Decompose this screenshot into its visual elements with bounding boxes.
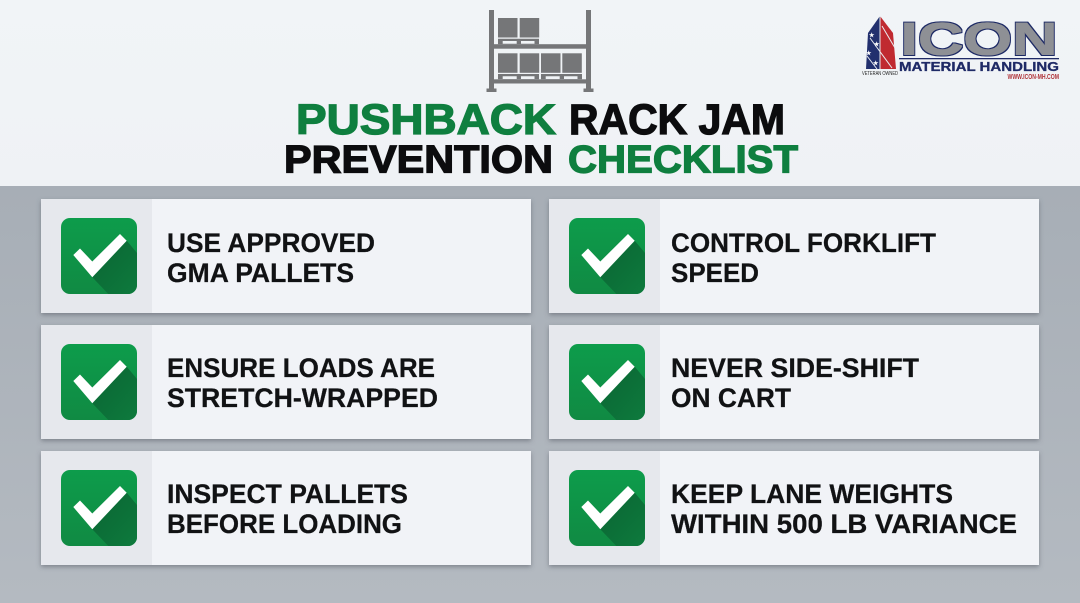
panel: ensure loads stretch-wrapped — [41, 325, 531, 439]
icon: check — [61, 344, 137, 420]
panel: inspect pallets — [41, 451, 531, 565]
text: item 2: CONTROL FORKLIFT — [671, 228, 936, 258]
logo wordmark: ICON — [900, 14, 1058, 65]
text: item 4: NEVER SIDE-SHIFT — [671, 353, 919, 383]
panel: use approved GMA pallets — [41, 199, 531, 313]
title line 2: PREVENTION — [284, 138, 553, 182]
title line 2: CHECKLIST — [568, 138, 798, 182]
icon: check — [569, 344, 645, 420]
text: item 3: STRETCH-WRAPPED — [167, 383, 438, 413]
title line 1: RACK JAM — [569, 97, 785, 144]
logo: ICON Material Handling — [862, 14, 1059, 81]
icon: pallet rack — [486, 10, 594, 92]
panel: keep lane weights — [549, 451, 1039, 565]
icon: check — [569, 218, 645, 294]
text: item 6: WITHIN 500 LB VARIANCE — [671, 509, 1017, 539]
title line 2 — [284, 138, 798, 182]
title line 1 — [296, 97, 785, 144]
logo flag mark: ★ — [873, 60, 879, 67]
panel: never side-shift on cart — [549, 325, 1039, 439]
logo flag mark: VETERAN OWNED — [862, 71, 898, 77]
title line 1: PUSHBACK — [296, 97, 556, 144]
logo flag mark — [862, 16, 898, 77]
icon: check — [61, 218, 137, 294]
text: item 2: SPEED — [671, 258, 759, 288]
text: item 5: INSPECT PALLETS — [167, 479, 408, 509]
logo flag mark: ★ — [869, 32, 875, 39]
text: item 1: GMA PALLETS — [167, 258, 354, 288]
logo flag mark: ★ — [866, 50, 872, 57]
page background — [0, 186, 1080, 603]
icon: check — [569, 470, 645, 546]
text: item 1: USE APPROVED — [167, 228, 375, 258]
panel: control forklift speed — [549, 199, 1039, 313]
logo flag mark: ★ — [874, 41, 880, 48]
text: item 6: KEEP LANE WEIGHTS — [671, 479, 953, 509]
logo subtitle: MATERIAL HANDLING — [899, 59, 1059, 74]
icon: check — [61, 470, 137, 546]
text: item 5: BEFORE LOADING — [167, 509, 402, 539]
text: item 4: ON CART — [671, 383, 791, 413]
title — [284, 97, 798, 182]
text: item 3: ENSURE LOADS ARE — [167, 353, 435, 383]
header band — [0, 0, 1080, 186]
